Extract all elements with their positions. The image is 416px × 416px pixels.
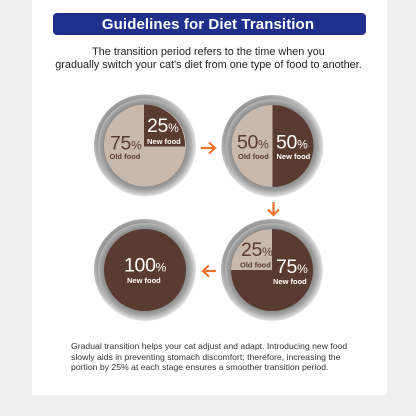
bowl 3: 25% old, 75% new — [221, 219, 323, 321]
bowl 4: 100% new — [94, 219, 196, 321]
bowl 3: 25% old, 75% new: 75% — [276, 256, 308, 278]
bowl 3: 25% old, 75% new: 25% — [241, 239, 273, 261]
bowl 4: 100% new: New food — [127, 276, 161, 285]
bowl 2: 50% old, 50% new: New food — [276, 152, 311, 161]
intro text: gradually switch your cat's diet from one type of food to another. — [55, 59, 362, 71]
bowl 1: 75% old, 25% new: 25% — [147, 115, 179, 137]
bowl 1: 75% old, 25% new: New food — [147, 137, 181, 146]
intro text: The transition period refers to the time when you — [92, 46, 325, 58]
bowl 1: 75% old, 25% new: Old food — [110, 152, 141, 161]
title banner — [53, 13, 366, 35]
bowl 2: 50% old, 50% new: Old food — [238, 152, 269, 161]
bowl 1: 75% old, 25% new — [94, 94, 196, 196]
closing text: portion by 25% at each stage ensures a smoother transition period. — [71, 362, 328, 372]
title banner: Guidelines for Diet Transition — [102, 16, 314, 33]
bowl 1: 75% old, 25% new: 75% — [110, 132, 142, 154]
bowl 2: 50% old, 50% new — [222, 95, 324, 197]
bowl 4: 100% new: 100% — [124, 254, 167, 276]
bowl 3: 25% old, 75% new: New food — [273, 277, 307, 286]
closing text — [71, 341, 347, 372]
bowl 2: 50% old, 50% new: 50% — [237, 132, 269, 154]
closing text: Gradual transition helps your cat adjust and adapt. Introducing new food — [71, 341, 347, 351]
intro text — [55, 46, 362, 71]
arrow: bowl 2 to bowl 3 — [268, 202, 279, 215]
bowl 2: 50% old, 50% new: 50% — [276, 132, 308, 154]
closing text: slowly aids in preventing stomach discomfort; therefore, increasing the — [71, 352, 340, 362]
arrow: bowl 1 to bowl 2 — [201, 142, 215, 154]
arrow: bowl 3 to bowl 4 — [203, 266, 216, 276]
bowl 3: 25% old, 75% new: Old food — [240, 260, 271, 270]
